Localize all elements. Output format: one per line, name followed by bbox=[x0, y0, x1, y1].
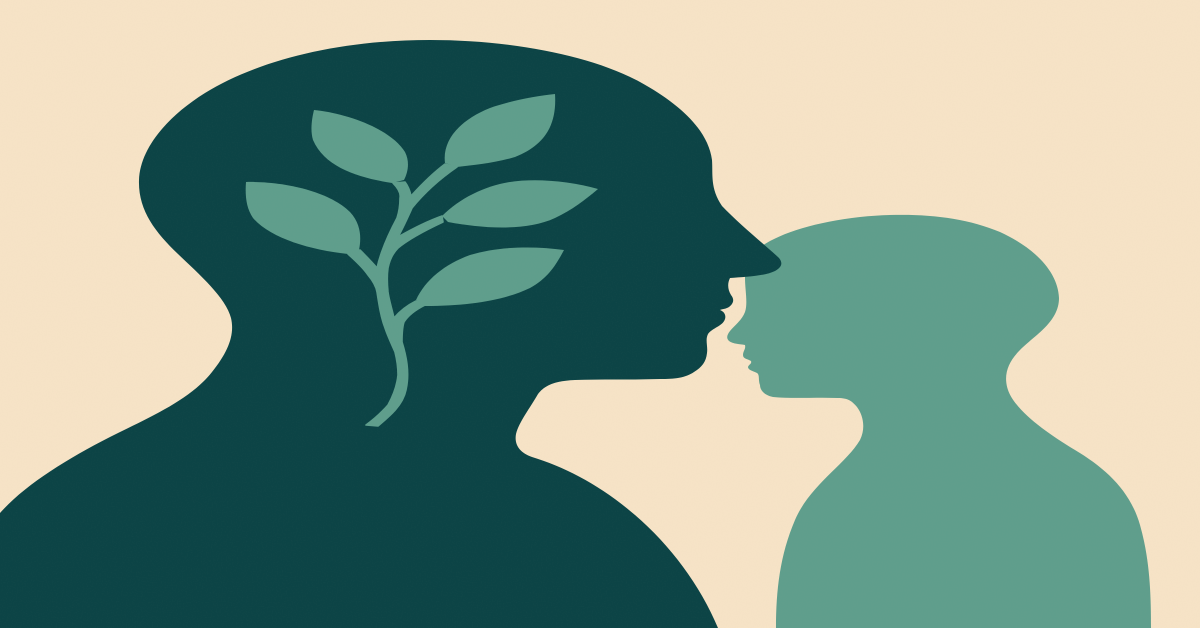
leaf: lower right bbox=[416, 247, 564, 306]
silhouette: small teal figure bbox=[727, 215, 1151, 628]
leaf: middle right bbox=[442, 180, 598, 228]
leaf: upper left bbox=[311, 110, 408, 183]
plant stem and branches bbox=[348, 164, 457, 426]
leaf: upper right bbox=[445, 94, 555, 167]
icon: plant growing inside the large head bbox=[246, 94, 598, 426]
leaf: far left bbox=[246, 182, 360, 254]
silhouette: large dark teal figure bbox=[0, 40, 781, 628]
